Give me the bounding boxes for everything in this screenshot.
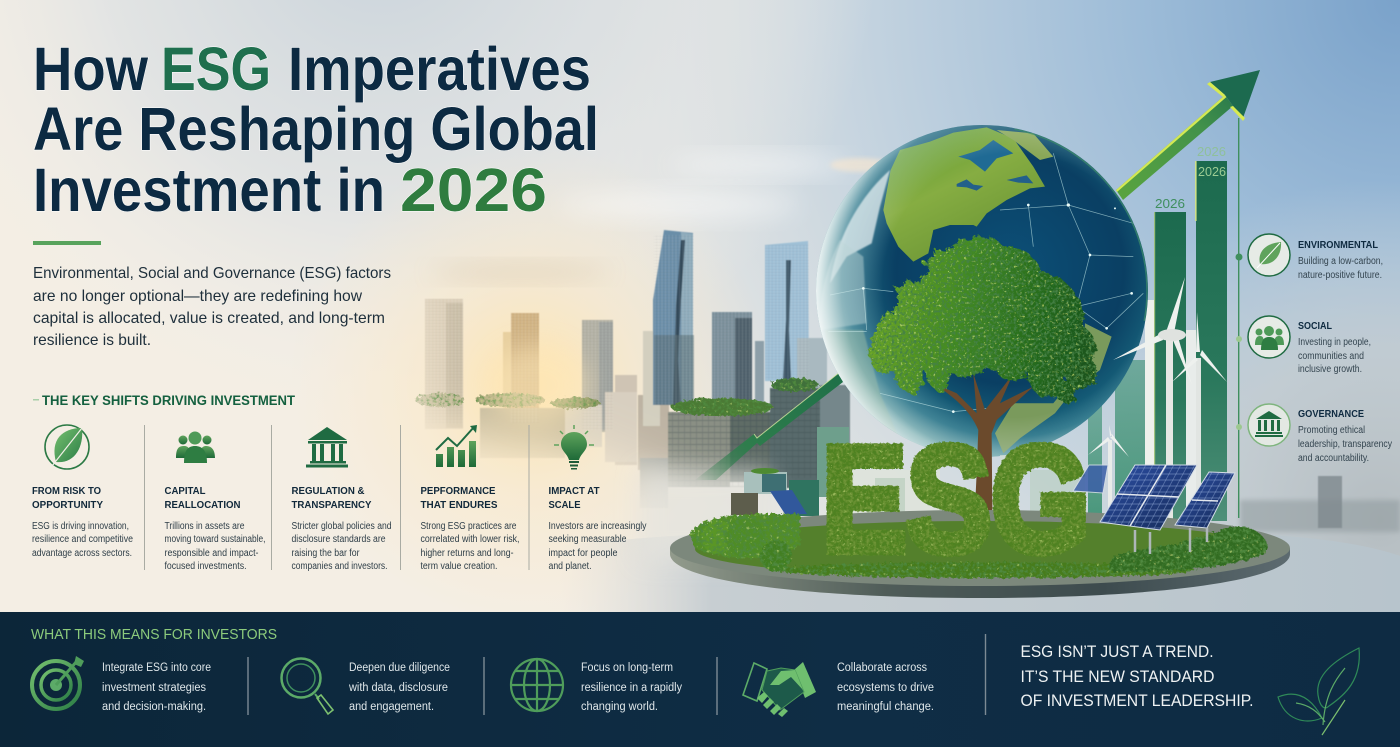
icon: people	[176, 432, 215, 463]
body text: Trillions in assets are	[164, 521, 245, 532]
body text	[32, 521, 133, 559]
body text: impact for people	[548, 548, 618, 559]
body text: Stricter global policies and	[292, 521, 392, 532]
title: Are Reshaping Global	[33, 95, 599, 163]
timeline line	[1236, 118, 1242, 518]
icon: magnifier	[282, 658, 333, 714]
closing statement: OF INVESTMENT LEADERSHIP.	[1020, 692, 1254, 710]
body text: Investing in people,	[1298, 337, 1371, 348]
body text	[1298, 256, 1383, 281]
intro paragraph	[33, 265, 391, 349]
title: 2026	[400, 156, 547, 224]
intro paragraph: Environmental, Social and Governance (ESG) factors	[33, 265, 391, 282]
icon: leaf in circle	[45, 425, 89, 469]
body text: moving toward sustainable,	[164, 534, 266, 545]
panel: what this means for investors	[0, 612, 1400, 747]
heading: REGULATION &	[292, 485, 365, 497]
panel: regulation and transparency	[292, 427, 392, 572]
text: with data, disclosure	[348, 682, 448, 694]
body text: Investors are increasingly	[548, 521, 646, 532]
body text	[164, 521, 266, 572]
panel: from risk to opportunity	[32, 425, 133, 559]
closing statement: ESG ISN’T JUST A TREND.	[1020, 643, 1214, 661]
icon: institution circle	[1248, 404, 1290, 446]
title underline	[33, 241, 101, 245]
section heading: key shifts: THE KEY SHIFTS DRIVING INVESTMENT	[42, 393, 296, 408]
title: How	[33, 35, 148, 103]
heading	[420, 485, 498, 511]
heading: TRANSPARENCY	[292, 499, 372, 511]
text: Integrate ESG into core	[102, 662, 211, 674]
item: due diligence	[282, 658, 450, 714]
body text: companies and investors.	[292, 561, 388, 572]
chart: rising bars with 2026 labels	[1088, 144, 1227, 525]
body text: disclosure standards are	[292, 534, 386, 545]
text: Collaborate across	[837, 662, 927, 674]
body text: and planet.	[548, 561, 592, 572]
ESG moss letters: ESG	[822, 415, 1090, 583]
heading: FROM RISK TO	[32, 485, 101, 497]
bar label: 2026 inside tall bar: 2026	[1198, 164, 1226, 179]
heading	[164, 485, 240, 511]
text	[581, 662, 682, 713]
body text: inclusive growth.	[1298, 364, 1362, 375]
panel: social pillar	[1248, 316, 1371, 375]
icon: globe	[511, 659, 563, 711]
icon: leaf circle	[1248, 234, 1290, 276]
heading: PEPFORMANCE	[420, 485, 496, 497]
tree	[868, 235, 1097, 543]
body text: nature-positive future.	[1298, 270, 1382, 281]
body text: raising the bar for	[292, 548, 360, 559]
body text: focused investments.	[164, 561, 246, 572]
title: ESG	[161, 35, 271, 103]
icon: growth chart	[436, 425, 477, 467]
text: investment strategies	[102, 682, 206, 694]
text: ecosystems to drive	[837, 682, 934, 694]
tree crown	[868, 235, 1097, 403]
text: and engagement.	[349, 701, 434, 713]
body text: resilience and competitive	[32, 534, 133, 545]
icon: people circle	[1248, 316, 1290, 358]
solar panels	[1073, 465, 1235, 554]
greenery on platform	[690, 513, 1268, 578]
body text: Strong ESG practices are	[420, 521, 517, 532]
icon: institution building	[306, 427, 348, 468]
text: and decision-making.	[102, 701, 206, 713]
body text: responsible and impact-	[164, 548, 258, 559]
heading: SCALE	[548, 499, 580, 511]
intro paragraph: capital is allocated, value is created, and long-term	[33, 310, 385, 327]
body text: correlated with lower risk,	[420, 534, 520, 545]
body text	[1298, 337, 1371, 375]
heading	[292, 485, 372, 511]
bar label: 2026 above tall bar: 2026	[1197, 144, 1226, 159]
heading: CAPITAL	[164, 485, 206, 497]
heading: REALLOCATION	[164, 499, 240, 511]
globe continents and grid	[820, 127, 1143, 453]
panel: environmental pillar	[1248, 234, 1383, 281]
heading	[548, 485, 600, 511]
body text: Building a low-carbon,	[1298, 256, 1383, 267]
intro paragraph: are no longer optional—they are redefining how	[33, 288, 362, 305]
title: Investment in	[33, 156, 385, 224]
body text: communities and	[1298, 351, 1364, 362]
title: Imperatives	[288, 35, 591, 103]
arrow: lower left growth arrow shaft	[695, 372, 843, 480]
body text: Promoting ethical	[1298, 425, 1365, 436]
icon: target	[32, 656, 84, 709]
icon: light bulb	[554, 425, 594, 470]
body text: advantage across sectors.	[32, 548, 132, 559]
item: collaborate	[743, 662, 934, 717]
platform	[670, 510, 1290, 598]
heading: WHAT THIS MEANS FOR INVESTORS	[31, 627, 277, 643]
body text: term value creation.	[420, 561, 498, 572]
item: long-term resilience	[511, 659, 682, 713]
body text	[1298, 425, 1392, 464]
text: resilience in a rapidly	[581, 682, 682, 694]
bar label: 2026 short bar: 2026	[1155, 196, 1185, 211]
ground floor and distant haze	[560, 470, 1400, 612]
heading: SOCIAL	[1298, 320, 1332, 332]
item: integrate ESG	[32, 656, 211, 713]
text	[102, 662, 211, 713]
body text: seeking measurable	[548, 534, 627, 545]
icon: handshake	[743, 662, 816, 717]
text: Deepen due diligence	[349, 662, 450, 674]
text: changing world.	[581, 701, 658, 713]
tree trunk and branches	[933, 373, 1033, 543]
text: Focus on long-term	[581, 662, 673, 674]
heading: THAT ENDURES	[420, 499, 498, 511]
panel: performance that endures	[420, 425, 520, 572]
heading: GOVERNANCE	[1298, 408, 1364, 420]
city skyline	[415, 230, 850, 508]
body text	[548, 521, 646, 572]
small buildings and green blocks behind letters	[731, 427, 1085, 540]
heading: OPPORTUNITY	[32, 499, 103, 511]
body text: higher returns and long-	[420, 548, 514, 559]
title	[33, 35, 599, 224]
text: meaningful change.	[837, 701, 934, 713]
closing statement: IT’S THE NEW STANDARD	[1020, 668, 1215, 686]
heading: IMPACT AT	[548, 485, 600, 497]
closing statement	[1020, 643, 1254, 710]
body text: ESG is driving innovation,	[32, 521, 129, 532]
body text	[420, 521, 520, 572]
heading: ENVIRONMENTAL	[1298, 239, 1379, 251]
icon: outline leaves	[1278, 648, 1359, 735]
panel: capital reallocation	[164, 432, 266, 572]
text	[348, 662, 450, 713]
arrow: large upward arrow	[1116, 70, 1260, 200]
rooftop trees	[415, 378, 819, 416]
globe	[816, 125, 1148, 457]
panel: governance pillar	[1248, 404, 1392, 464]
body text: and accountability.	[1298, 453, 1369, 464]
heading	[32, 485, 103, 511]
panel: impact at scale	[548, 425, 646, 572]
text	[837, 662, 934, 713]
intro paragraph: resilience is built.	[33, 332, 151, 349]
body text	[292, 521, 392, 572]
wind turbines	[1088, 277, 1227, 520]
